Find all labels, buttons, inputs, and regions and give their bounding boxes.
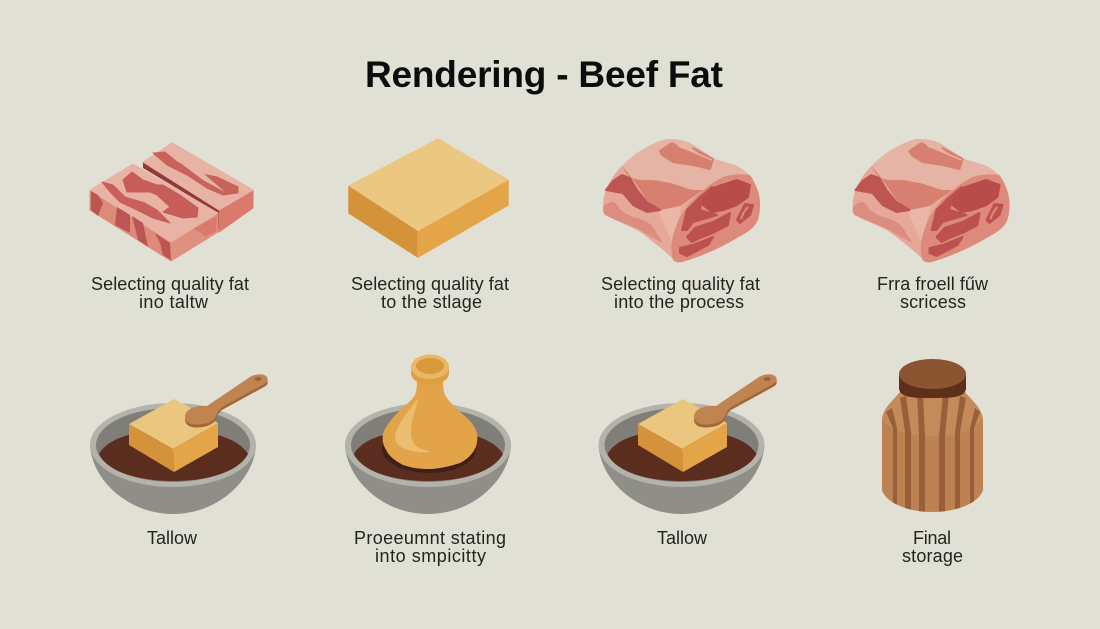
step 3 caption: [601, 274, 760, 312]
step 2 caption: to the stlage: [381, 292, 482, 312]
step 3 caption: Selecting quality fat: [601, 274, 760, 294]
step 8 caption: storage: [902, 546, 963, 566]
step 1: sliced fat slab icon: [90, 143, 253, 261]
step 3: marbled roast icon: [603, 139, 760, 262]
step 7 caption: Tallow: [657, 528, 708, 548]
step 4 caption: [877, 274, 989, 312]
step 5: bowl with tallow block and spoon icon: [90, 374, 268, 514]
step 6 caption: [354, 528, 506, 566]
step 8: striped storage jar icon: [882, 359, 983, 514]
step 1 caption: [91, 274, 249, 312]
step 4: marbled roast icon: [852, 139, 1010, 262]
step 6 caption: Proeeumnt stating: [354, 528, 506, 548]
step 7: bowl with tallow block and spoon icon: [598, 374, 777, 514]
title: Rendering - Beef Fat: [365, 54, 723, 95]
step 4 caption: Frra froell fűw: [877, 274, 989, 294]
step 1 caption: Selecting quality fat: [91, 274, 249, 294]
step 2: fat block icon: [349, 139, 508, 257]
step 4 caption: scricess: [900, 292, 966, 312]
step 6 caption: into smpicitty: [375, 546, 486, 566]
step 2 caption: Selecting quality fat: [351, 274, 509, 294]
step 2 caption: [351, 274, 509, 312]
step 5 caption: Tallow: [147, 528, 198, 548]
step 8 caption: [902, 528, 963, 566]
step 1 caption: ino taltw: [139, 292, 209, 312]
step 8 caption: Final: [913, 528, 951, 548]
step 3 caption: into the process: [614, 292, 744, 312]
step 6: bowl with clay vessel icon: [345, 354, 511, 514]
